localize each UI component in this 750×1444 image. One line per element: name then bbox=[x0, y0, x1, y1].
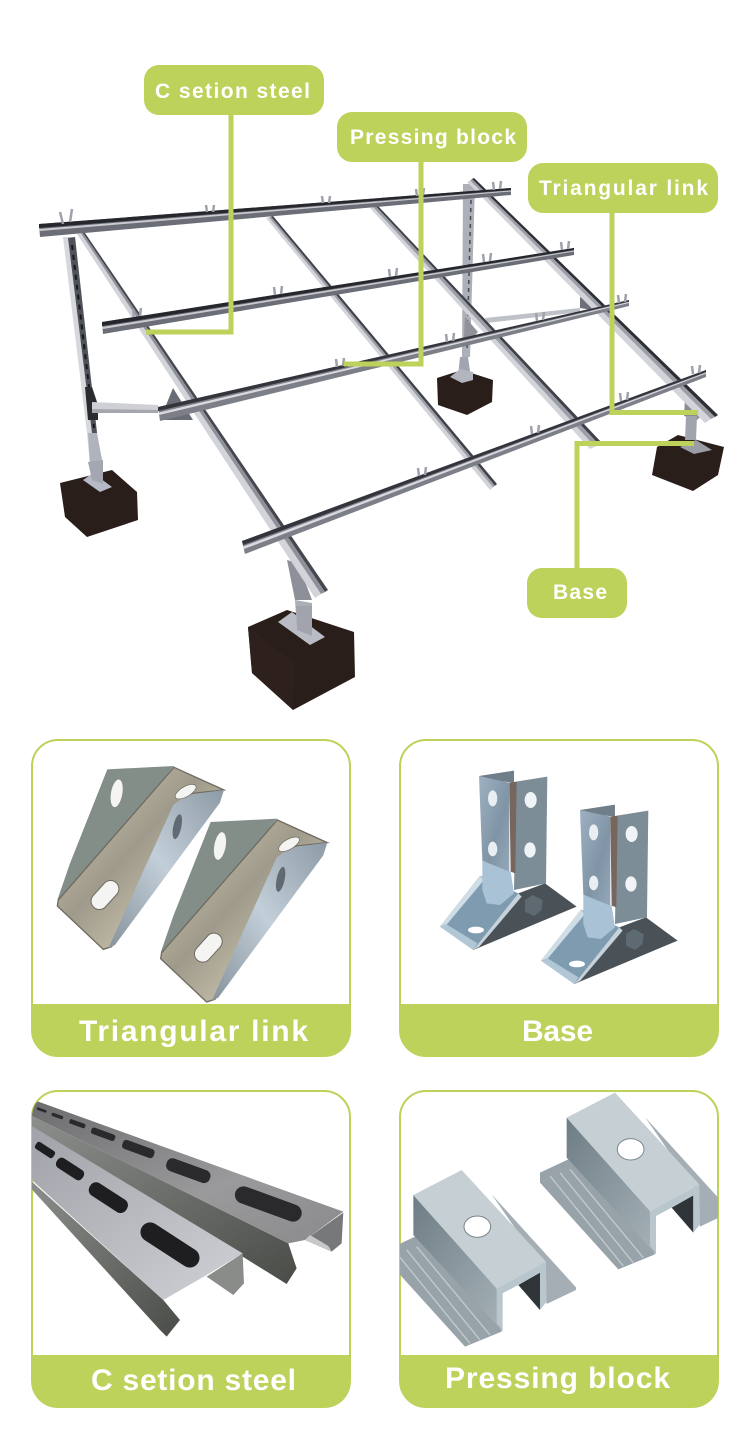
photo: C section steel channels bbox=[30, 1102, 352, 1409]
label: Triangular link: Triangular link bbox=[79, 1015, 308, 1048]
panel: Pressing block bbox=[387, 1091, 729, 1409]
label: Base: Base bbox=[522, 1015, 593, 1048]
label band bbox=[398, 1355, 720, 1409]
callout: Pressing block bbox=[337, 112, 527, 364]
label: Pressing block: Pressing block bbox=[445, 1362, 670, 1395]
callout: Base: Base bbox=[553, 581, 607, 604]
callout: Base bbox=[527, 444, 694, 618]
photo: base brackets bbox=[398, 771, 720, 1058]
callout: C setion steel: C setion steel bbox=[155, 80, 310, 103]
label band bbox=[398, 1004, 720, 1058]
label band bbox=[30, 1355, 352, 1409]
callout: Pressing block: Pressing block bbox=[350, 126, 516, 149]
callout: C setion steel bbox=[144, 65, 324, 332]
longitudinal rails bbox=[77, 178, 718, 598]
panel: Triangular link bbox=[30, 740, 352, 1058]
panel: C setion steel bbox=[30, 1091, 352, 1409]
callout: Triangular link bbox=[528, 163, 718, 412]
rail clamps bbox=[60, 181, 700, 476]
cross rails bbox=[39, 188, 706, 554]
label: C setion steel: C setion steel bbox=[91, 1364, 296, 1397]
concrete blocks bbox=[60, 370, 724, 710]
mounting structure diagram bbox=[39, 178, 724, 710]
panel: Base bbox=[398, 740, 720, 1058]
photo: pressing blocks bbox=[387, 1093, 729, 1409]
photo: triangular link brackets bbox=[30, 766, 352, 1058]
label band bbox=[30, 1004, 352, 1058]
uprights and braces bbox=[63, 184, 712, 645]
callout: Triangular link: Triangular link bbox=[539, 177, 708, 200]
